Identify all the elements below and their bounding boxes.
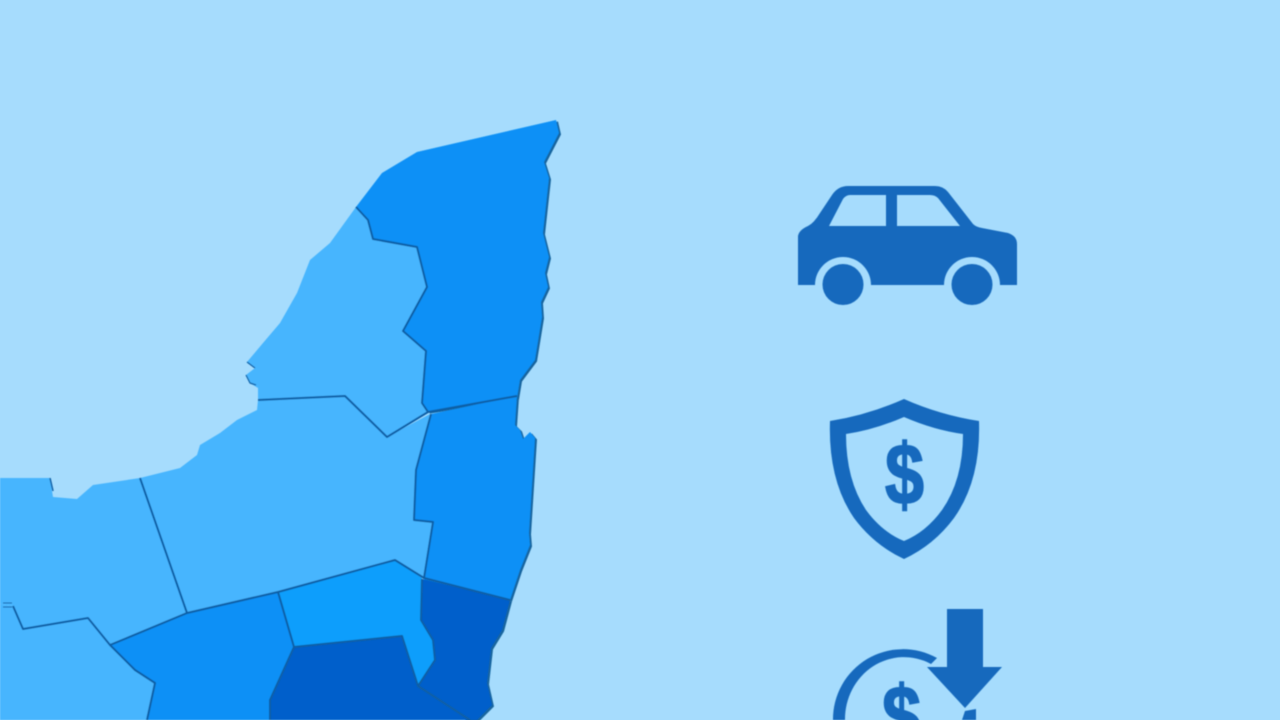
icon: savings with down arrow [833, 609, 1002, 720]
dollar sign: $ [885, 426, 924, 523]
region: northeast [356, 120, 559, 412]
wheel: front [822, 264, 864, 305]
region: metro dark [270, 636, 470, 720]
icon: car [798, 186, 1017, 305]
region borders [3, 207, 517, 720]
coin ring [833, 649, 937, 720]
region: coastal dark [418, 579, 510, 720]
map of regions [0, 120, 561, 720]
wheel: rear [952, 264, 992, 305]
region: west [0, 478, 187, 645]
region: southwest [0, 604, 155, 720]
region: east [414, 396, 535, 600]
region: central [140, 396, 433, 613]
region: north-central [246, 207, 428, 437]
region: south tier [110, 592, 294, 720]
down arrow [927, 609, 1002, 708]
map edge shadow [358, 122, 561, 720]
region: river valley [278, 560, 435, 686]
icon: shield with dollar [830, 399, 979, 559]
